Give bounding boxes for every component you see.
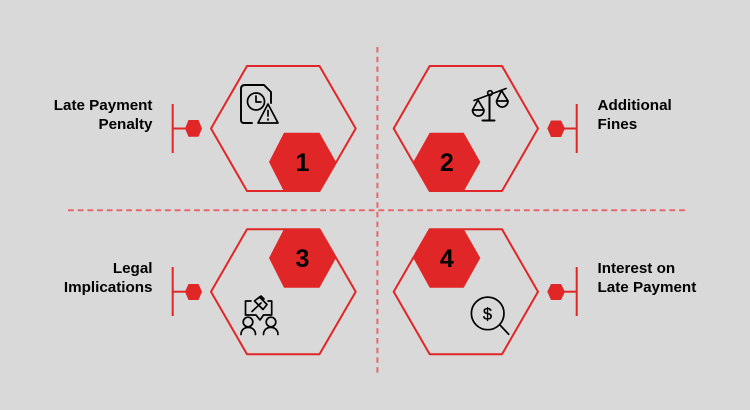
icon: gavel and two people: [241, 296, 278, 334]
large hexagon outline 3: [211, 229, 356, 354]
number hexagon 4: 4: [440, 245, 454, 273]
large hexagon outline 2: [394, 66, 538, 191]
number hexagon 2: 2: [440, 149, 454, 177]
connector marker 2: [547, 104, 577, 153]
large hexagon outline 1: [211, 66, 356, 191]
label: additional fines: Additional: [598, 97, 672, 114]
number hexagon 3: 3: [296, 245, 309, 273]
label: interest on late payment: Late Payment: [598, 279, 696, 296]
panel: late payment penalty: [54, 66, 356, 192]
label: additional fines: Fines: [598, 116, 637, 133]
connector marker 3: [173, 267, 202, 316]
label: legal implications: Implications: [64, 279, 152, 296]
number hexagon 1: 1: [296, 149, 310, 177]
icon: magnifier with dollar: $: [483, 306, 492, 324]
panel: additional fines: [394, 66, 672, 192]
panel: interest on late payment: [394, 229, 696, 354]
connector marker 4: [547, 267, 577, 316]
large hexagon outline 4: [394, 229, 538, 354]
panel: legal implications: [64, 229, 356, 354]
connector marker 1: [173, 104, 202, 153]
icon: scales of justice: [472, 88, 508, 120]
number hexagon 1: [269, 133, 336, 192]
number hexagon 2: [413, 133, 480, 192]
label: late payment penalty: Late Payment: [54, 97, 152, 114]
label: interest on late payment: Interest on: [598, 260, 675, 277]
icon: document with clock and warning: [241, 85, 278, 123]
number hexagon 4: [413, 229, 480, 288]
label: late payment penalty: Penalty: [98, 116, 153, 133]
label: legal implications: Legal: [113, 260, 152, 277]
number hexagon 3: [269, 229, 336, 288]
icon: magnifier with dollar: [471, 297, 509, 334]
